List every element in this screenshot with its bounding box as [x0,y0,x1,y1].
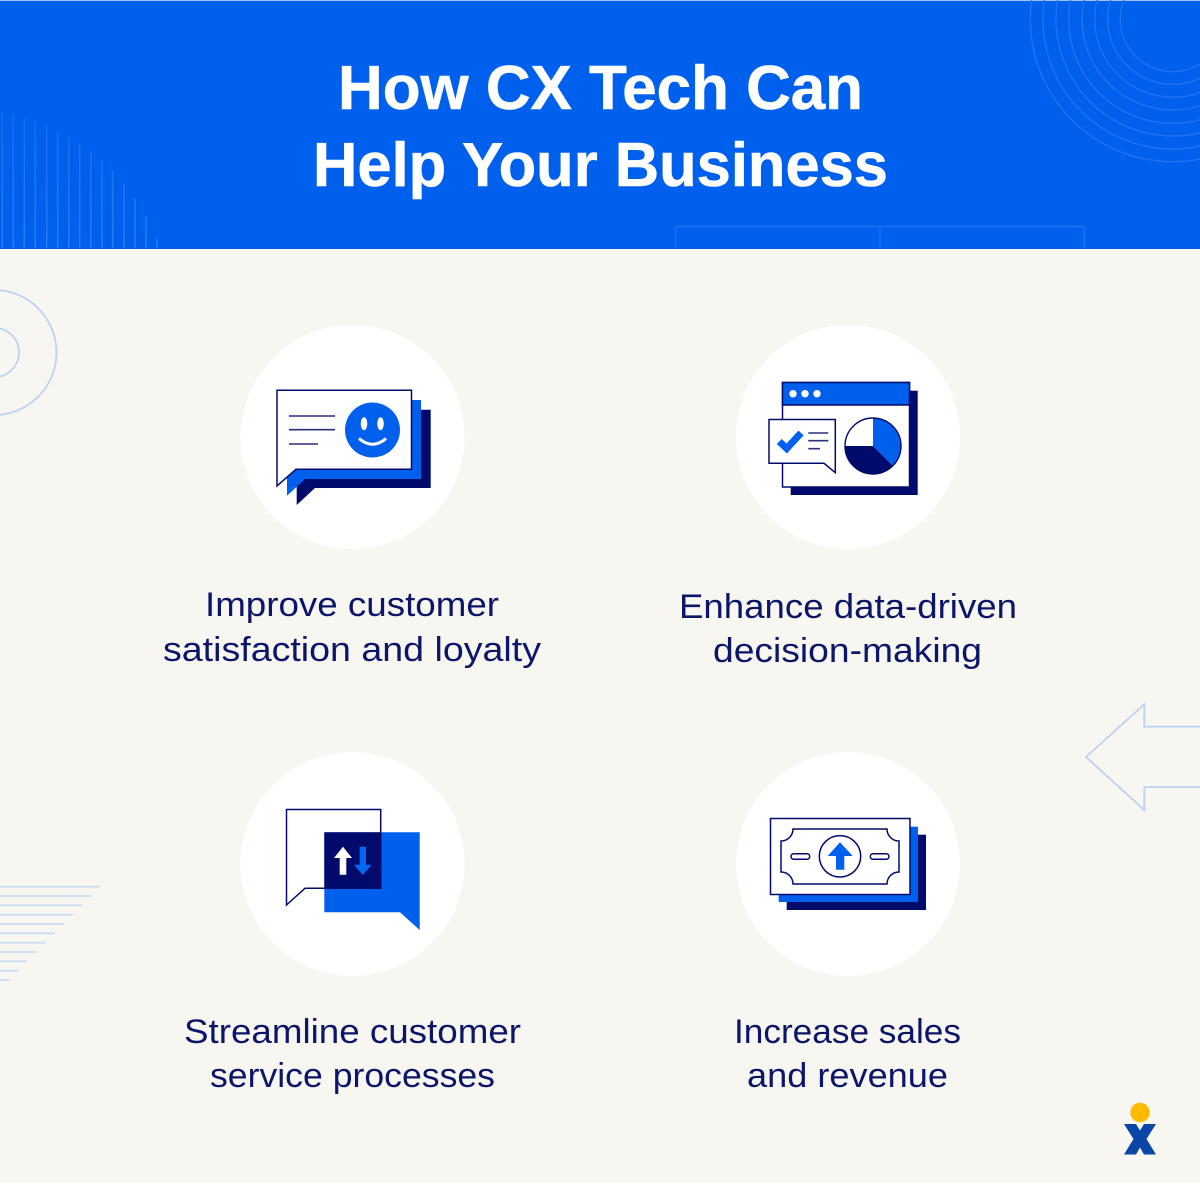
label [679,588,1017,670]
label: satisfaction and loyalty [163,631,541,669]
title: How CX Tech Can [338,54,863,123]
label: and revenue [747,1057,948,1095]
icon: dashboard window with pie chart [769,382,918,495]
header band [0,0,1200,249]
panel: customer satisfaction [163,325,541,669]
label [734,1013,961,1095]
label: decision-making [713,632,982,670]
label: Increase sales [734,1013,961,1051]
decoration: left circles [0,290,56,415]
label: Enhance data-driven [679,588,1017,626]
decoration: horizontal stripes [0,887,100,980]
icon circle [240,752,464,976]
decoration: outline arrow [1086,704,1200,810]
icon circle [736,752,960,976]
label: Streamline customer [184,1013,521,1051]
label: Improve customer [205,586,499,624]
decoration: vertical stripes [2,113,157,248]
panel: sales and revenue [734,752,961,1095]
icon: overlapping chat bubbles with arrows [286,810,420,930]
title: Help Your Business [313,131,888,200]
label [163,586,541,669]
logo [1124,1103,1156,1154]
title [313,54,888,200]
decoration: concentric arcs [1030,0,1200,162]
icon circle [240,325,464,549]
panel: streamlined service [184,752,521,1095]
icon circle [736,325,960,549]
icon: banknote with up arrow [770,818,926,910]
label [184,1013,521,1095]
decoration: outlined boxes [676,226,1084,248]
panel: data-driven decisions [679,325,1017,670]
icon: chat bubble with smiley [277,390,431,505]
label: service processes [210,1057,495,1095]
